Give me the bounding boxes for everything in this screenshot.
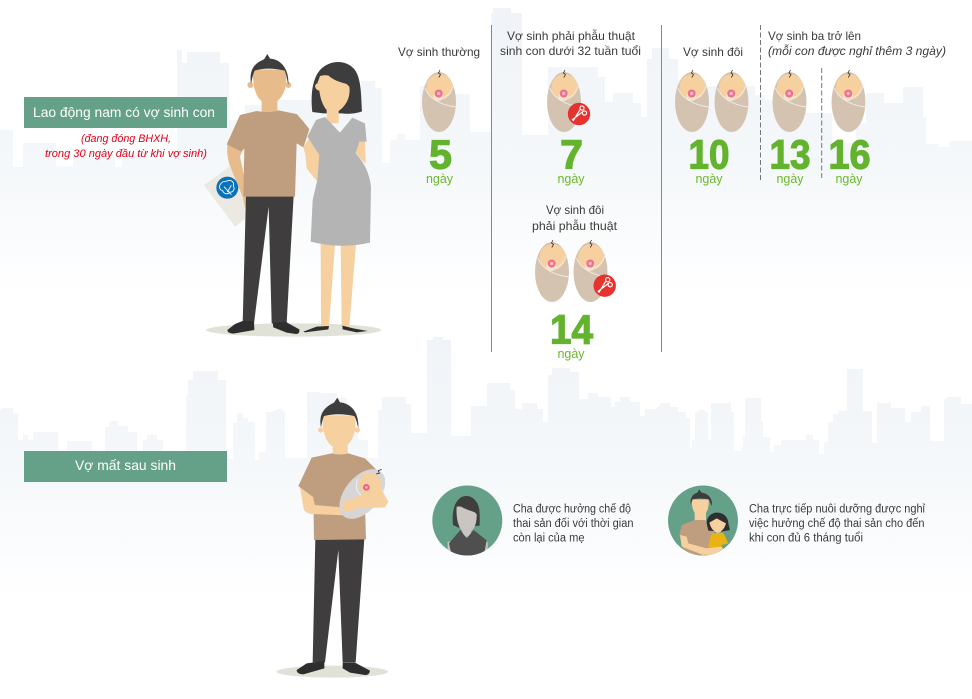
text: father gets mother's remaining leave: Cha được hưởng chế độ (513, 504, 631, 516)
icon: father and child avatar (668, 486, 738, 560)
section header: Vợ mất sau sinh: Vợ mất sau sinh (75, 457, 176, 473)
entry: normal birth 5 days (398, 45, 480, 186)
entry: surgery under 32 weeks 7 days: ngày (557, 172, 585, 186)
text: father gets mother's remaining leave (513, 504, 634, 544)
background skyline bottom (0, 337, 972, 600)
entry: normal birth 5 days: Vợ sinh thường (398, 45, 480, 59)
entry: twins 10 days: Vợ sinh đôi (683, 45, 743, 59)
text: father raising child: việc hưởng chế độ thai sản cho đến (749, 518, 924, 530)
entry: surgery under 32 weeks 7 days: sinh con dưới 32 tuần tuổi (500, 44, 641, 58)
entry: twins with surgery 14 days: Vợ sinh đôi (546, 203, 604, 217)
entry: more children 16 days: 16 (828, 132, 870, 178)
note: conditions for father: trong 30 ngày đầu từ khi vợ sinh) (45, 148, 207, 160)
illustration: father holding baby (277, 398, 394, 678)
divider lines (492, 25, 822, 352)
entry: surgery under 32 weeks 7 days (500, 28, 641, 186)
entry: twins 10 days (675, 45, 748, 186)
background skyline top (0, 8, 972, 295)
illustration: couple with insurance paper (204, 54, 381, 337)
text: father raising child: Cha trực tiếp nuôi dưỡng được nghỉ (749, 504, 925, 516)
entry: twins 10 days: ngày (695, 172, 723, 186)
entry: triplets 13 days (770, 70, 810, 186)
icon: mother avatar (432, 486, 502, 558)
entry: surgery under 32 weeks 7 days: 7 (560, 132, 583, 178)
note: conditions for father (45, 133, 207, 160)
entry: triplets heading: (mỗi con được nghỉ thêm 3 ngày) (768, 43, 946, 58)
entry: twins with surgery 14 days: phải phẫu thuật (532, 218, 618, 233)
section header: Vợ mất sau sinh (24, 451, 227, 482)
entry: triplets 13 days: 13 (770, 132, 810, 178)
section header: Lao động nam có vợ sinh con (24, 97, 227, 128)
section header: Lao động nam có vợ sinh con: Lao động nam có vợ sinh con (33, 104, 215, 120)
note: conditions for father: (đang đóng BHXH, (81, 133, 171, 145)
text: father raising child (749, 504, 925, 544)
text: father gets mother's remaining leave: thai sản đối với thời gian (513, 518, 634, 530)
text: father raising child: khi con đủ 6 tháng tuổi (749, 532, 863, 544)
entry: more children 16 days (828, 70, 870, 186)
entry: twins with surgery 14 days (532, 203, 618, 361)
entry: triplets heading: Vợ sinh ba trở lên (768, 29, 861, 43)
entry: surgery under 32 weeks 7 days: Vợ sinh phải phẫu thuật (507, 28, 636, 43)
entry: twins 10 days: 10 (688, 132, 730, 178)
entry: twins with surgery 14 days: 14 (550, 306, 593, 352)
entry: normal birth 5 days: ngày (426, 172, 454, 186)
entry: triplets heading (768, 29, 946, 58)
entry: twins with surgery 14 days: ngày (557, 347, 585, 361)
entry: normal birth 5 days: 5 (429, 132, 452, 178)
entry: triplets 13 days: ngày (776, 172, 804, 186)
entry: more children 16 days: ngày (835, 172, 863, 186)
text: father gets mother's remaining leave: còn lại của mẹ (513, 532, 584, 544)
